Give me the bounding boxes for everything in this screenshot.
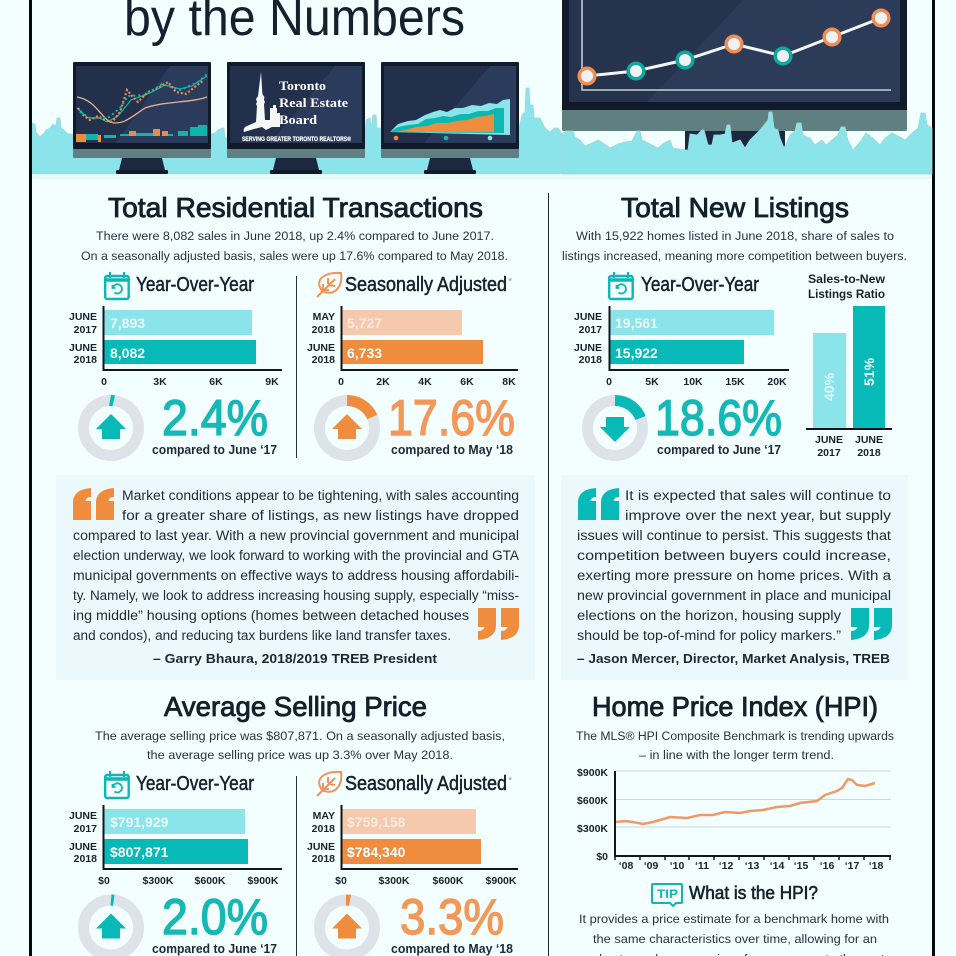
quote text: and condos), and reducing tax burdens like land transfer taxes. <box>73 628 451 643</box>
quote text: should be top-of-mind for policy markers.” <box>577 628 841 643</box>
bar chart: seasonally adjusted price: MAY <box>313 810 335 822</box>
subheading: seasonally adjusted: * <box>508 276 513 288</box>
panel: total new listings <box>562 192 907 459</box>
bar chart: seasonally adjusted price: 2018 <box>312 823 335 835</box>
line chart: HPI <box>577 767 891 872</box>
heading: Home Price Index (HPI) <box>592 691 878 722</box>
quote text <box>577 488 892 643</box>
quote text: compared to last year. With a new provincial government and municipal <box>73 528 519 543</box>
bar chart: seasonally adjusted price: $784,340 <box>347 844 406 860</box>
bar chart: new listings: 15,922 <box>615 345 658 361</box>
heading: Total Residential Transactions <box>108 192 483 223</box>
line chart: HPI: ‘08 <box>619 860 633 872</box>
quote text: exerting more pressure on home prices. With a <box>577 568 892 583</box>
bar chart: YoY sales: JUNE <box>69 311 97 323</box>
bar chart: seasonally adjusted price: 2018 <box>312 853 335 865</box>
bar chart: seasonally adjusted price: $0 <box>335 875 347 887</box>
subheading: seasonally adjusted: Seasonally Adjusted <box>345 773 507 795</box>
column divider <box>548 193 549 956</box>
attribution: – Garry Bhaura, 2018/2019 TREB President <box>153 651 438 666</box>
bar chart: seasonally adjusted sales: 0 <box>338 376 344 388</box>
bar chart: seasonally adjusted price: JUNE <box>307 841 335 853</box>
bar chart: new listings: 2017 <box>579 324 602 336</box>
intro text <box>562 229 907 263</box>
bar chart: new listings <box>574 306 789 388</box>
stat: 17.6%: 17.6% <box>388 390 515 446</box>
donut: 2.4% up <box>84 395 138 456</box>
logo wordmark: Real Estate <box>279 95 348 110</box>
monitor: area chart <box>381 62 519 174</box>
quote text: ty. Namely, we look to address increasing housing supply, especially “miss- <box>73 588 519 603</box>
logo wordmark: SERVING GREATER TORONTO REALTORS® <box>242 135 351 143</box>
bar chart: seasonally adjusted sales: 8K <box>502 376 516 388</box>
line chart: HPI: ‘18 <box>869 860 883 872</box>
bar chart: seasonally adjusted sales: MAY <box>313 311 335 323</box>
stat: 18.6%: 18.6% <box>655 390 782 446</box>
line chart: HPI: ‘11 <box>695 860 709 872</box>
bar chart: YoY price: 2017 <box>74 823 97 835</box>
line chart: HPI: $0 <box>596 851 608 863</box>
donut: 2.0% up <box>84 894 138 955</box>
bar chart: YoY price: $807,871 <box>110 844 169 860</box>
bar chart: seasonally adjusted sales <box>307 306 518 388</box>
icon: CN Tower skyline <box>244 72 280 132</box>
line chart: HPI: ‘09 <box>644 860 658 872</box>
bar chart: seasonally adjusted sales: 2K <box>376 376 390 388</box>
bar chart: seasonally adjusted price: $600K <box>433 875 464 887</box>
bar chart: seasonally adjusted price: $900K <box>486 875 517 887</box>
line chart: HPI: $900K <box>577 767 608 779</box>
monitor: Toronto Real Estate Board logo <box>227 62 365 174</box>
intro text <box>576 729 894 762</box>
explanation text: the same characteristics over time, allowing for an <box>593 932 877 946</box>
bar chart: new listings: JUNE <box>574 342 602 354</box>
bar chart: seasonally adjusted sales: 4K <box>418 376 432 388</box>
stat: 3.3%: compared to May ‘18 <box>391 942 513 956</box>
icon: tip bubble <box>652 884 682 906</box>
bar chart: YoY sales: 0 <box>101 376 107 388</box>
panel: average selling price <box>69 691 518 956</box>
bar chart: sales-to-new listings ratio <box>806 272 892 459</box>
bar chart: YoY price: 2018 <box>74 853 97 865</box>
panel: total residential transactions <box>69 192 518 458</box>
bar chart: YoY sales: JUNE <box>69 342 97 354</box>
icon: leaf <box>317 772 341 796</box>
icon: opening quote <box>578 488 619 520</box>
quote text: Market conditions appear to be tightening, with sales accounting <box>122 488 519 503</box>
icon: opening quote <box>73 488 114 520</box>
intro text: – in line with the longer term trend. <box>639 748 834 762</box>
bar chart: sales-to-new listings ratio: Listings Ratio <box>808 287 885 301</box>
bar chart: sales-to-new listings ratio: 51% <box>861 357 877 386</box>
bar chart: sales-to-new listings ratio: 2017 <box>817 447 841 459</box>
bar chart: sales-to-new listings ratio: 2018 <box>857 447 881 459</box>
bar chart: YoY price: $0 <box>98 875 110 887</box>
icon: closing quote <box>478 608 519 640</box>
heading: Average Selling Price <box>164 691 427 722</box>
icon: calendar <box>105 771 129 798</box>
quote text <box>73 488 519 643</box>
monitor: trading chart <box>73 62 211 174</box>
quote text: issues will continue to persist. This suggests that <box>577 528 891 543</box>
quote text: It is expected that sales will continue to <box>625 488 891 503</box>
logo wordmark <box>242 78 351 143</box>
intro text <box>95 729 505 762</box>
quote text: elections on the horizon, housing supply <box>577 608 841 623</box>
intro text <box>81 229 508 263</box>
bar chart: sales-to-new listings ratio: Sales-to-New <box>808 272 886 286</box>
icon: closing quote <box>851 608 892 640</box>
bar chart: sales-to-new listings ratio: JUNE <box>815 434 843 446</box>
bar chart: seasonally adjusted sales: 2018 <box>312 354 335 366</box>
bar chart: new listings: 5K <box>645 376 659 388</box>
line chart: HPI: ‘17 <box>845 860 859 872</box>
stat: 3.3%: 3.3% <box>400 889 504 945</box>
intro text: The MLS® HPI Composite Benchmark is trending upwards <box>576 729 894 743</box>
explanation text: It provides a price estimate for a benchmark home with <box>579 912 889 926</box>
bar chart: sales-to-new listings ratio: JUNE <box>855 434 883 446</box>
panel: TREB president quote <box>56 475 535 680</box>
icon: calendar <box>105 272 129 299</box>
bar chart: YoY price: $600K <box>195 875 226 887</box>
intro text: There were 8,082 sales in June 2018, up 2.4% compared to June 2017. <box>96 229 494 243</box>
stat: 2.4%: compared to June ‘17 <box>152 443 277 457</box>
stat: 18.6%: compared to June ‘17 <box>657 443 781 457</box>
bar chart: YoY price: JUNE <box>69 810 97 822</box>
subheading: year-over-year: Year-Over-Year <box>641 274 759 296</box>
bar chart: YoY price: JUNE <box>69 841 97 853</box>
bar chart: YoY sales: 2017 <box>74 324 97 336</box>
intro text: With 15,922 homes listed in June 2018, share of sales to <box>576 229 894 243</box>
stat: 2.0%: 2.0% <box>162 889 268 945</box>
line chart: HPI: ‘14 <box>770 860 784 872</box>
icon: leaf <box>317 273 341 297</box>
bar chart: seasonally adjusted sales: 2018 <box>312 324 335 336</box>
stat: 2.0%: compared to June ‘17 <box>152 942 277 956</box>
panel: market analysis quote <box>561 475 908 680</box>
attribution: – Jason Mercer, Director, Market Analysis, TREB <box>577 651 890 666</box>
bar chart: sales-to-new listings ratio: 40% <box>821 372 837 401</box>
intro text: The average selling price was $807,871. On a seasonally adjusted basis, <box>95 729 505 743</box>
bar chart: seasonally adjusted price: $759,158 <box>347 814 406 830</box>
quote text: ing middle” housing options (homes between detached houses <box>73 608 469 623</box>
subheading: year-over-year: Year-Over-Year <box>136 773 254 795</box>
icon: calendar <box>609 272 633 299</box>
bar chart: YoY price: $300K <box>143 875 174 887</box>
heading: Total New Listings <box>621 192 849 223</box>
bar chart: seasonally adjusted sales: JUNE <box>307 342 335 354</box>
bar chart: new listings: 2018 <box>579 354 602 366</box>
line chart: HPI: ‘10 <box>670 860 684 872</box>
bar chart: new listings: 0 <box>606 376 612 388</box>
quote text: municipal governments on effective ways to address housing affordabili- <box>73 568 519 583</box>
intro text: listings increased, meaning more competition between buyers. <box>562 249 907 263</box>
stat: 17.6%: compared to May ‘18 <box>391 443 513 457</box>
bar chart: new listings: 20K <box>767 376 787 388</box>
bar chart: YoY sales: 9K <box>265 376 279 388</box>
subheading: seasonally adjusted: * <box>508 775 513 787</box>
subheading: seasonally adjusted: Seasonally Adjusted <box>345 274 507 296</box>
donut: 17.6% up <box>320 400 374 456</box>
bar chart: YoY price: $900K <box>248 875 279 887</box>
quote text: improve over the next year, but supply <box>625 508 891 523</box>
line chart: HPI: ‘16 <box>820 860 834 872</box>
foreground skyline <box>562 112 932 174</box>
explanation text <box>578 912 889 956</box>
bar chart: seasonally adjusted sales: 6,733 <box>347 345 382 361</box>
quote text: new provincial government in place and municipal <box>577 588 891 603</box>
line chart: HPI: ‘13 <box>745 860 759 872</box>
bar chart: YoY price: $791,929 <box>110 814 169 830</box>
intro text: On a seasonally adjusted basis, sales were up 17.6% compared to May 2018. <box>81 249 508 263</box>
bar chart: YoY sales: 8,082 <box>110 345 145 361</box>
bar chart: seasonally adjusted price: $300K <box>379 875 410 887</box>
line chart: HPI: ‘12 <box>719 860 733 872</box>
subheading: year-over-year: Year-Over-Year <box>136 274 254 296</box>
quote text: for a greater share of listings, as new listings have dropped <box>122 508 519 523</box>
intro text: the average selling price was up 3.3% over May 2018. <box>147 748 453 762</box>
bar chart: new listings: 10K <box>683 376 703 388</box>
bar chart: new listings: 15K <box>725 376 745 388</box>
bar chart: YoY sales: 3K <box>153 376 167 388</box>
line chart: HPI: $300K <box>577 823 608 835</box>
bar chart: YoY sales: 2018 <box>74 354 97 366</box>
bar chart: YoY sales: 6K <box>209 376 223 388</box>
panel: home price index <box>576 691 894 956</box>
bar chart: seasonally adjusted price <box>307 805 518 887</box>
logo wordmark: Toronto <box>279 78 326 93</box>
quote text: competition between buyers could increase, <box>577 548 891 563</box>
stat: 2.4%: 2.4% <box>162 390 268 446</box>
donut: 18.6% down <box>588 400 642 456</box>
bar chart: seasonally adjusted sales: 6K <box>460 376 474 388</box>
bar chart: YoY sales <box>69 306 282 388</box>
subheading: what is the HPI: What is the HPI? <box>689 883 818 903</box>
bar chart: YoY price <box>69 805 282 887</box>
bar chart: new listings: JUNE <box>574 311 602 323</box>
quote text: election underway, we look forward to working with the provincial and GTA <box>73 548 519 563</box>
line chart: HPI: $600K <box>577 795 608 807</box>
bar chart: YoY sales: 7,893 <box>110 315 145 331</box>
bar chart: new listings: 19,561 <box>615 315 658 331</box>
donut: 3.3% up <box>320 894 374 955</box>
line chart: HPI: ‘15 <box>794 860 808 872</box>
monitor: large line chart <box>562 0 907 152</box>
logo wordmark: Board <box>279 112 318 127</box>
header illustration: skyline <box>32 88 932 179</box>
icon: tip bubble: TIP <box>657 889 678 901</box>
bar chart: seasonally adjusted sales: 5,727 <box>347 315 382 331</box>
